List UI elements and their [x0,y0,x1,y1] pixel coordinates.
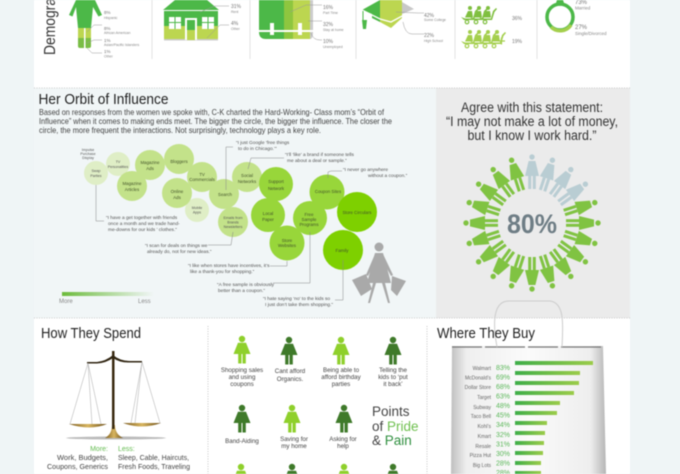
text: statement: but I know I work hard.” [468,128,596,143]
icon: briefcase chart: Unemployed [323,45,343,49]
pride and pain figures [232,336,402,474]
panel: agree statement [436,88,630,318]
chart: orbit bubbles: Articles [125,187,140,192]
chart: orbit bubbles: Programs [299,222,319,227]
icon: children strollers [461,6,523,48]
legend: more to less: More [59,299,73,305]
icon: graduation cap chart: 22% [424,33,435,39]
chart: orbit bubbles: Support [268,179,284,184]
panel: her orbit of influence [34,88,436,318]
chart: orbit bubbles: Display [82,156,94,160]
icon: person chart: African American [104,31,131,35]
chart: orbit bubbles [80,140,408,308]
icon: graduation cap chart: High School [424,39,443,43]
icon: person chart: Other [104,54,114,58]
chart: store bars: Kohl’s [477,424,491,430]
figure captions: Band-Aiding [225,438,259,445]
icon: person chart: 8% [104,10,111,15]
heading: points of pride and pain: Points [372,404,410,419]
chart: orbit bubbles: “I just Google ‘free things [236,140,290,146]
chart: orbit bubbles: Network [268,186,285,191]
chart: orbit bubbles: Websites [278,243,297,248]
chart: orbit bubbles: Family [336,248,349,253]
chart: orbit bubbles: Paper [262,217,274,222]
chart: orbit bubbles: Swap [92,169,100,173]
chart: store bars: Big Lots [473,463,491,469]
figure captions: Saving for [280,436,308,443]
icon: person chart: 1% [104,38,111,43]
chart: orbit bubbles: Impulse [82,148,94,152]
icon: shopping bag [451,301,606,474]
panel: points of pride and pain [221,336,419,474]
figure captions: help [337,443,349,450]
chart: orbit bubbles: Personalities [108,165,128,169]
legend: more to less [59,292,154,305]
icon: ring chart: Married [575,6,591,10]
chart: store bars [465,361,593,474]
icon: woman shopping [352,242,406,303]
panel: where they buy [437,301,606,474]
chart: orbit bubbles: me about a deal or sample.” [287,158,347,164]
figure captions: Asking for [329,436,357,443]
chart: orbit bubbles: I just don’t take them shopping.” [265,302,333,308]
chart: orbit bubbles: Ads [146,166,155,171]
figure captions: parties [332,381,350,388]
chart: orbit bubbles: Mobile [192,206,202,210]
icon: house chart: Rent [231,10,238,14]
chart: store bars: 68% [496,384,510,391]
chart: orbit bubbles: TV [116,160,121,164]
chart: orbit bubbles: Commercials [189,177,216,182]
icon: ring chart: 27% [575,25,588,31]
icon: briefcase chart: 16% [323,5,334,11]
icon: person chart: Hispanic [104,16,118,20]
chart: orbit bubbles: “I never go anywhere [343,167,388,173]
figure captions: Telling the [379,367,407,374]
chart: orbit bubbles: “A free sample is obviously [217,282,275,288]
figure captions: afford birthday [321,374,362,381]
icon: balance scale [66,351,166,440]
chart: store bars: Subway [473,405,491,411]
chart: orbit bubbles: me-downs for our kids ’ clothes.” [108,227,177,233]
chart: orbit bubbles: Newsletters [224,225,243,229]
chart: orbit bubbles: “I’ll ‘like’ a brand if someone tells [285,152,354,158]
chart: orbit bubbles: Local [263,211,273,216]
text: more and less: Sleep, Cable, Haircuts, [118,455,189,462]
chart: store bars: 69% [496,374,510,382]
chart: orbit bubbles: Networks [238,179,257,184]
chart: orbit bubbles: Social [241,173,253,178]
text: more and less: Work, Budgets, [57,455,108,462]
figure captions [221,367,408,450]
figure captions: my home [281,443,307,450]
chart: orbit bubbles: “I have a get together with friends [106,215,178,221]
chart: orbit bubbles: Store Circulars [342,210,372,215]
chart: orbit bubbles: Magazine [122,181,142,186]
icon: briefcase chart: Stay at home [323,28,344,32]
chart: orbit bubbles: Purchase [80,152,96,156]
chart: orbit bubbles: without a coupon.” [368,173,408,179]
chart: orbit bubbles: Ads [173,195,182,200]
icon: ring chart [547,0,607,36]
chart: store bars: Target [477,395,492,401]
heading: where they buy: Where They Buy [437,326,536,342]
panel: demographics [42,0,607,59]
figure captions: and using [229,374,256,381]
icon: graduation cap chart: 42% [424,13,435,19]
chart: orbit bubbles: Magazine [140,160,160,165]
chart: orbit bubbles: Emails from [224,216,242,220]
icon: house chart: 4% [231,21,239,27]
text: orbit intro [39,107,392,135]
icon: person chart [69,0,139,58]
chart: orbit bubbles: Bloggers [170,159,188,164]
heading: points of pride and pain [372,404,419,448]
text: orbit intro: circle, the more frequent the interactions. Not surprisingly, technology plays a key role. [39,125,321,135]
chart: store bars: 83% [496,365,510,372]
icon ring: 80 percent women [463,154,601,292]
heading: orbit: Her Orbit of Influence [38,92,168,108]
figure captions: kids to ‘put [378,374,408,381]
chart: store bars: Dollar Store [465,385,491,391]
icon: briefcase chart: Part Time [323,11,338,15]
text: more and less: Coupons, Generics [47,464,109,471]
chart: store bars: 31% [496,442,510,448]
icon: person chart: 8% [104,26,111,31]
chart: store bars: 45% [496,412,510,420]
chart: orbit bubbles: “I scan for deals on things we [145,243,208,249]
chart: store bars: Resale [475,444,491,450]
text: more and less: Less: [118,446,135,453]
chart: orbit bubbles: Coupon Sites [315,189,342,194]
figure captions: it back’ [383,381,403,388]
text: more and less [47,446,190,471]
chart: store bars: Kmart [478,434,492,440]
chart: store bars: 63% [496,394,510,400]
icon: children strollers: 19% [512,39,523,45]
text: statement: “I may not make a lot of money, [446,114,618,129]
chart: orbit bubbles: already do, not for new ideas.” [147,249,212,255]
icon: house chart: 31% [231,4,242,10]
chart: orbit bubbles: Brands [227,220,239,224]
figure captions: coupons [230,381,254,388]
text: statement [446,100,618,143]
chart: store bars: 34% [496,422,510,429]
figure captions: Cant afford [275,368,306,375]
chart: orbit bubbles: TV [199,172,205,177]
chart: store bars: Pizza Hut [470,453,492,459]
icon: house chart: Other [231,27,241,31]
figure captions: Organics. [277,376,304,383]
chart: orbit bubbles: Store [282,238,293,243]
chart: orbit bubbles: like a thank-you for shopping.” [190,269,255,275]
text: more and less: Fresh Foods, Traveling [118,464,190,471]
icon: briefcase chart [259,0,344,49]
legend: more to less: Less [138,299,151,305]
heading: how they spend: How They Spend [41,326,141,342]
chart: orbit bubbles: better than a coupon.” [218,288,265,294]
chart: store bars: Walmart [473,366,492,372]
chart: store bars: 30% [496,451,510,458]
icon: briefcase chart: 10% [323,39,334,45]
icon: house chart [163,0,242,40]
chart: store bars: Taco Bell [471,414,491,420]
icon: ring chart: Single/Divorced [575,31,607,36]
figure captions: Shopping sales [221,367,263,374]
icon: graduation cap chart [362,0,446,43]
chart: orbit bubbles: Sample [302,217,317,222]
chart: orbit bubbles: to do in Chicago.’” [238,146,277,152]
text: statement: Agree with this statement: [461,100,603,115]
panel: how they spend [41,326,190,471]
heading: points of pride and pain: & Pain [372,433,412,448]
text: orbit intro: Based on responses from the women we spoke with, C-K charted the Hard-Working- Class mom’s “Orbit of [39,107,385,117]
icon: person chart: Asian/Pacific Islanders [104,43,139,47]
icon: children strollers: 36% [512,16,523,22]
icon: briefcase chart: 32% [323,22,334,28]
chart: store bars: 32% [496,432,510,439]
text: orbit intro: Influence” when it comes to making ends meet. The bigger the circle, the bigger the influence. The closer the [39,116,392,126]
figure captions: Being able to [323,367,360,374]
chart: orbit bubbles: “I hate saying ‘no’ to the kids so [263,296,330,302]
chart: store bars: 28% [496,460,510,468]
icon: graduation cap chart: Some College [424,18,446,22]
icon: person chart: 1% [104,49,111,54]
chart: orbit bubbles: Search [218,192,233,197]
chart: orbit bubbles: Apps [193,210,201,214]
text: more and less: More: [90,446,108,453]
chart: orbit bubbles: Online [171,189,184,194]
chart: store bars: McDonald’s [465,376,491,382]
number: 80%: 80% [507,209,557,239]
chart: orbit bubbles: “I like when stores have incentives, it’s [188,263,270,269]
chart: store bars: 48% [496,403,510,410]
chart: orbit bubbles: once a month and we trade hand- [108,221,180,227]
chart: orbit bubbles: Parties [90,174,102,178]
heading: points of pride and pain: of Pride [372,419,419,434]
chart: orbit bubbles: Free [304,212,314,217]
icon: ring chart: 73% [575,0,588,6]
